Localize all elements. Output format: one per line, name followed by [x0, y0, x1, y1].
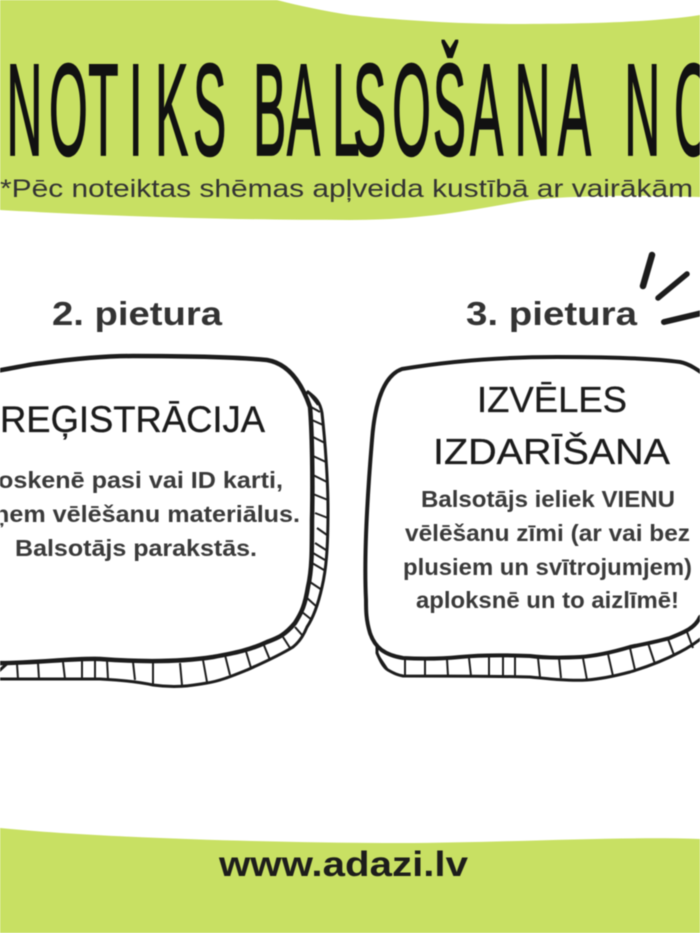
- panel text: registration: Balsotājs parakstās.: [15, 535, 257, 561]
- panel text: registration: oskenē pasi vai ID karti,: [0, 467, 283, 493]
- bottom green banner: [0, 828, 700, 933]
- footer website: www.adazi.lv: [218, 845, 469, 884]
- panel: ballot choice: [365, 357, 700, 680]
- icon: emphasis strokes: [643, 255, 700, 322]
- panel text: ballot choice: plusiem un svītrojumjem): [403, 554, 692, 580]
- panel text: ballot choice: Balsotājs ieliek VIENU: [421, 486, 675, 512]
- title: NOTIKS BALSOŠANA NO: [6, 36, 700, 183]
- subtitle: *Pēc noteiktas shēmas apļveida kustībā ar vairākām: [0, 175, 693, 203]
- panel title: registration: REĢISTRĀCIJA: [0, 399, 265, 440]
- panel text: ballot choice: vēlēšanu zīmi (ar vai bez: [405, 520, 690, 546]
- panel title: ballot choice: [433, 379, 670, 472]
- panel text: ballot choice: [403, 486, 692, 613]
- panel text: ballot choice: aploksnē un to aizlīmē!: [416, 587, 679, 613]
- panel: registration: [0, 356, 328, 686]
- panel title: ballot choice: IZDARĪŠANA: [433, 431, 670, 472]
- panel title: ballot choice: IZVĒLES: [477, 379, 627, 420]
- panel text: registration: ņem vēlēšanu materiālus.: [0, 501, 300, 527]
- panel text: registration: [0, 467, 300, 561]
- heading: stop 2: 2. pietura: [52, 295, 223, 332]
- heading: stop 3: 3. pietura: [466, 295, 638, 332]
- top green banner: [0, 0, 700, 220]
